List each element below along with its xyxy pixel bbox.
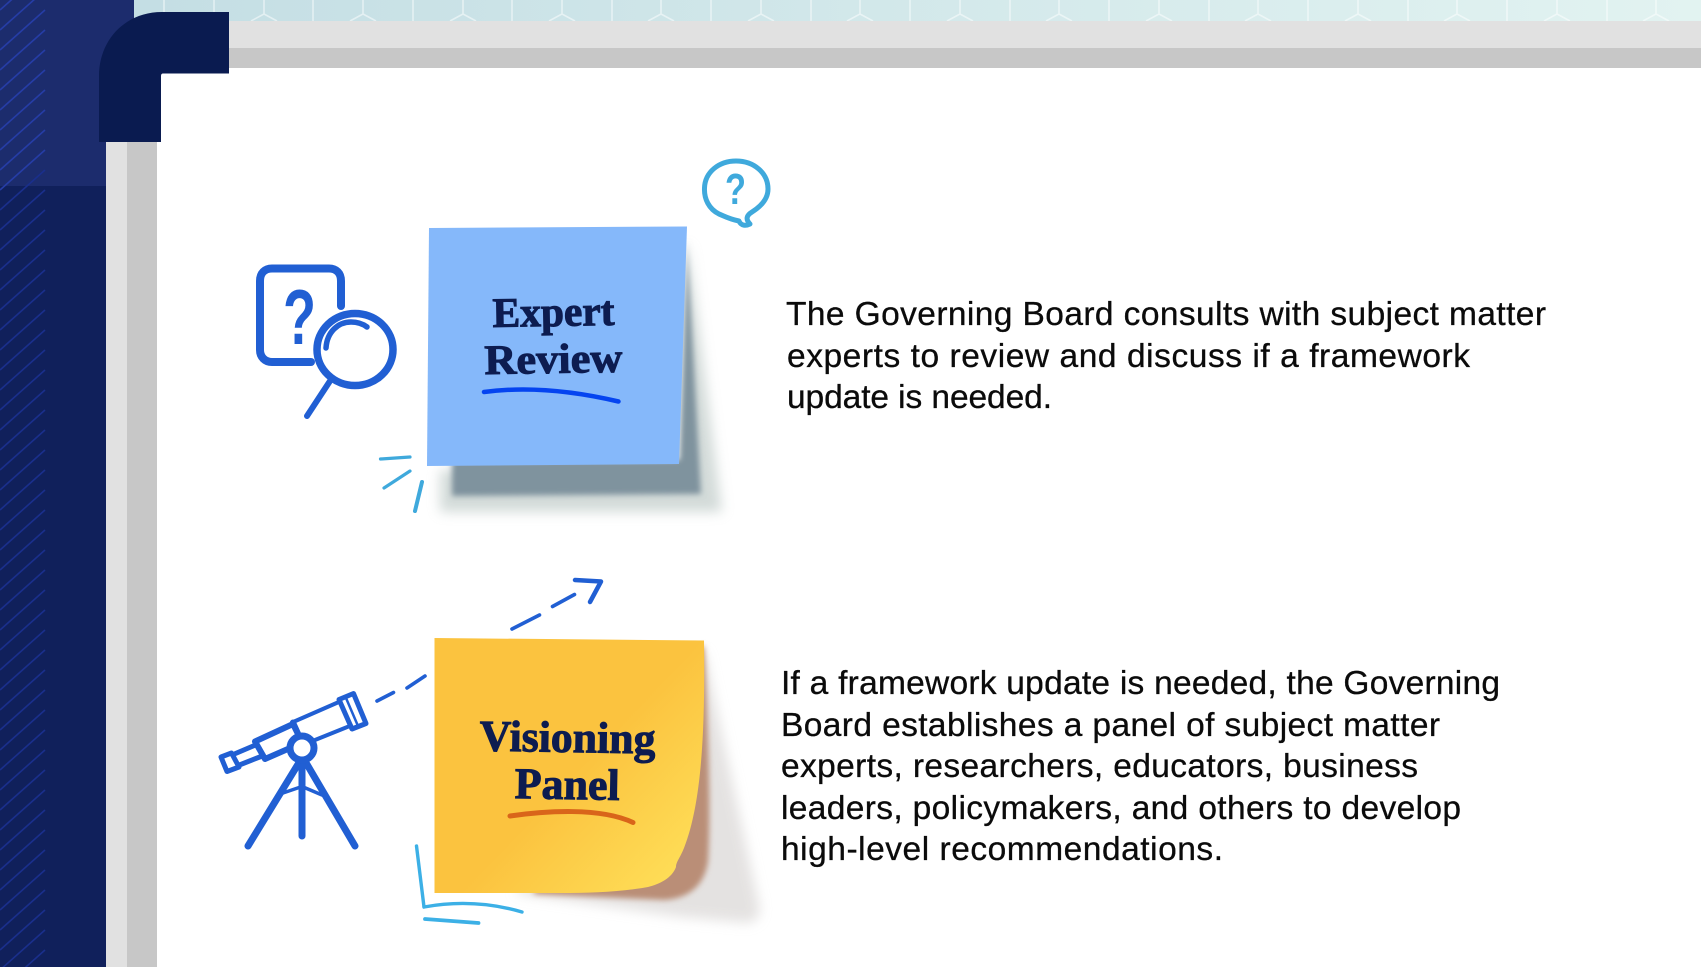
text block: visioning panel description: leaders, policymakers, and others to develop	[781, 790, 1461, 827]
text block: visioning panel description: Board establishes a panel of subject matter	[781, 707, 1440, 744]
heading: Visioning Panel: Panel	[514, 759, 620, 810]
text block: expert review description: experts to review and discuss if a framework	[787, 338, 1470, 375]
sticky note: Expert Review	[427, 226, 722, 512]
text block: expert review description: The Governing Board consults with subject matter	[786, 296, 1546, 333]
accent: corner bracket lines	[416, 846, 522, 923]
background: navy side panel	[0, 0, 134, 967]
text block: expert review description	[786, 296, 1546, 416]
icon: speech bubble with question mark: ?	[725, 165, 746, 214]
blue underline	[484, 389, 618, 402]
heading: Expert Review	[483, 289, 623, 384]
arrow: dashed sight line from telescope	[377, 580, 601, 701]
text block: visioning panel description: experts, researchers, educators, business	[781, 748, 1418, 785]
heading: Expert Review: Expert	[492, 289, 615, 337]
accent: spark lines	[380, 457, 422, 511]
text block: visioning panel description: high-level recommendations.	[781, 831, 1223, 868]
text block: visioning panel description	[781, 665, 1500, 868]
icon: question card and magnifying glass: ?	[283, 273, 316, 361]
board frame: grey left rail	[106, 130, 157, 967]
text block: expert review description: update is needed.	[787, 379, 1052, 416]
board frame: grey top rail	[200, 21, 1701, 68]
heading: Expert Review: Review	[484, 336, 623, 384]
heading: Visioning Panel	[478, 711, 656, 811]
background: teal hexagon strip	[134, 0, 1701, 21]
sticky note: Visioning Panel	[434, 638, 760, 923]
board frame: navy corner bracket	[99, 12, 229, 142]
icon: telescope on tripod	[221, 694, 366, 846]
icon: question card and magnifying glass	[260, 268, 393, 416]
orange underline	[510, 812, 633, 822]
icon: speech bubble with question mark	[704, 161, 768, 225]
text block: visioning panel description: If a framework update is needed, the Governing	[781, 665, 1500, 702]
heading: Visioning Panel: Visioning	[479, 711, 656, 764]
